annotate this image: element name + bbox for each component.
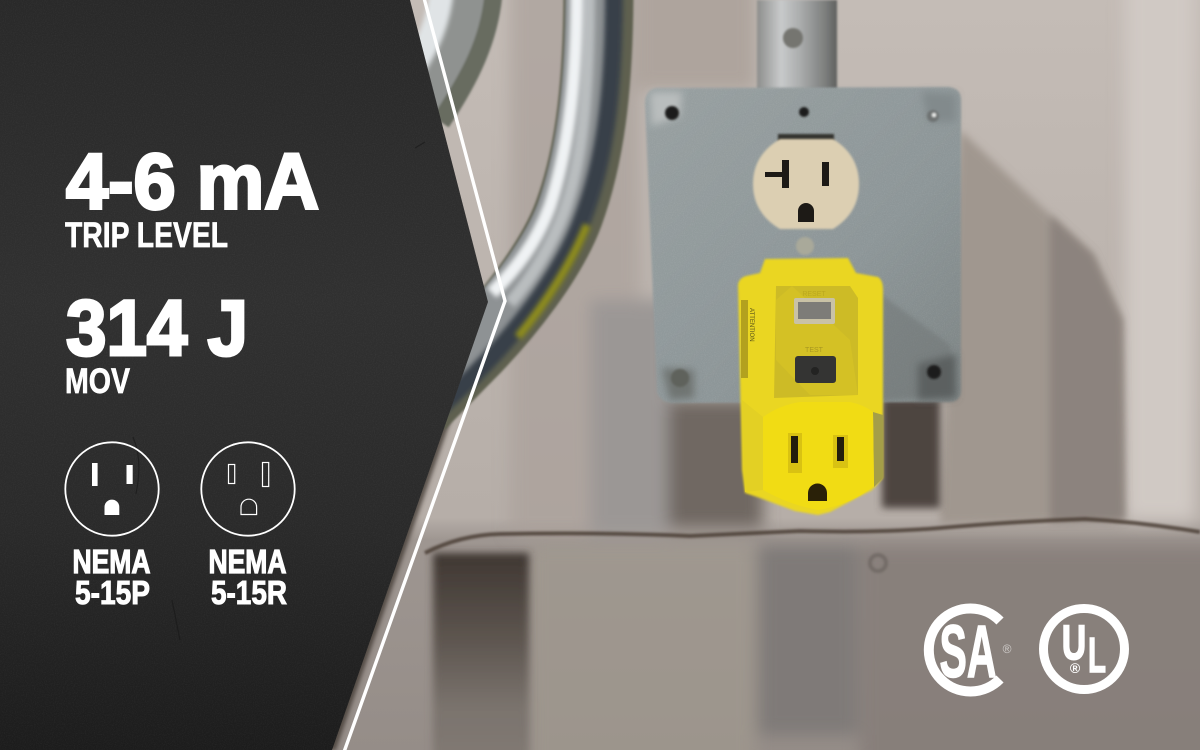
label: NEMA 5-15R: NEMA — [208, 543, 286, 580]
conduit pipe: vertical stub above box — [757, 0, 837, 90]
dark stats panel — [0, 0, 488, 750]
label: NEMA 5-15P — [72, 543, 150, 611]
stat label MOV: MOV — [65, 362, 131, 401]
box screw holes — [665, 106, 941, 379]
label: NEMA 5-15R: 5-15R — [211, 574, 287, 611]
panel scratches — [133, 142, 425, 640]
CSA certification logo — [929, 608, 1012, 693]
reset button — [794, 291, 835, 324]
panel edge dirt — [332, 420, 447, 750]
stat value 314 J: 314 J — [66, 283, 248, 372]
reset button: RESET — [802, 291, 826, 298]
test button: TEST — [805, 347, 824, 354]
stat label trip level: TRIP LEVEL — [65, 216, 228, 255]
UL certification logo: L — [1088, 629, 1106, 683]
icon: NEMA 5-15R receptacle — [201, 442, 295, 536]
CSA certification logo: SA — [940, 610, 996, 693]
conduit pipe: front bend — [416, 0, 614, 416]
UL certification logo — [1044, 608, 1124, 690]
stat: MOV — [65, 283, 248, 401]
adapter receptacle — [788, 433, 848, 501]
UL certification logo: U — [1062, 617, 1086, 670]
junction box — [645, 87, 961, 403]
box screws — [671, 110, 939, 387]
CSA certification logo: ® — [1003, 642, 1012, 656]
stat value 4-6 mA: 4-6 mA — [66, 136, 319, 226]
label: NEMA 5-15R — [208, 543, 287, 611]
box cast shadow on wall — [940, 130, 1124, 524]
stat: trip level — [65, 136, 319, 255]
dark stain on lower wall — [433, 553, 529, 750]
label: NEMA 5-15P: NEMA — [72, 543, 150, 580]
icon: NEMA 5-15P plug — [65, 442, 159, 536]
yellow GFCI adapter — [738, 258, 883, 515]
box corner lugs — [650, 92, 956, 400]
test button — [795, 347, 836, 383]
UL certification logo: ® — [1070, 660, 1081, 676]
adapter warning label: ATTENTION — [748, 308, 754, 342]
white chevron line — [344, 0, 505, 750]
conduit pipe: rear bend — [412, 0, 472, 110]
beige wall outlet — [753, 134, 859, 229]
adapter warning label — [741, 300, 754, 378]
label: NEMA 5-15P: 5-15P — [75, 574, 150, 611]
